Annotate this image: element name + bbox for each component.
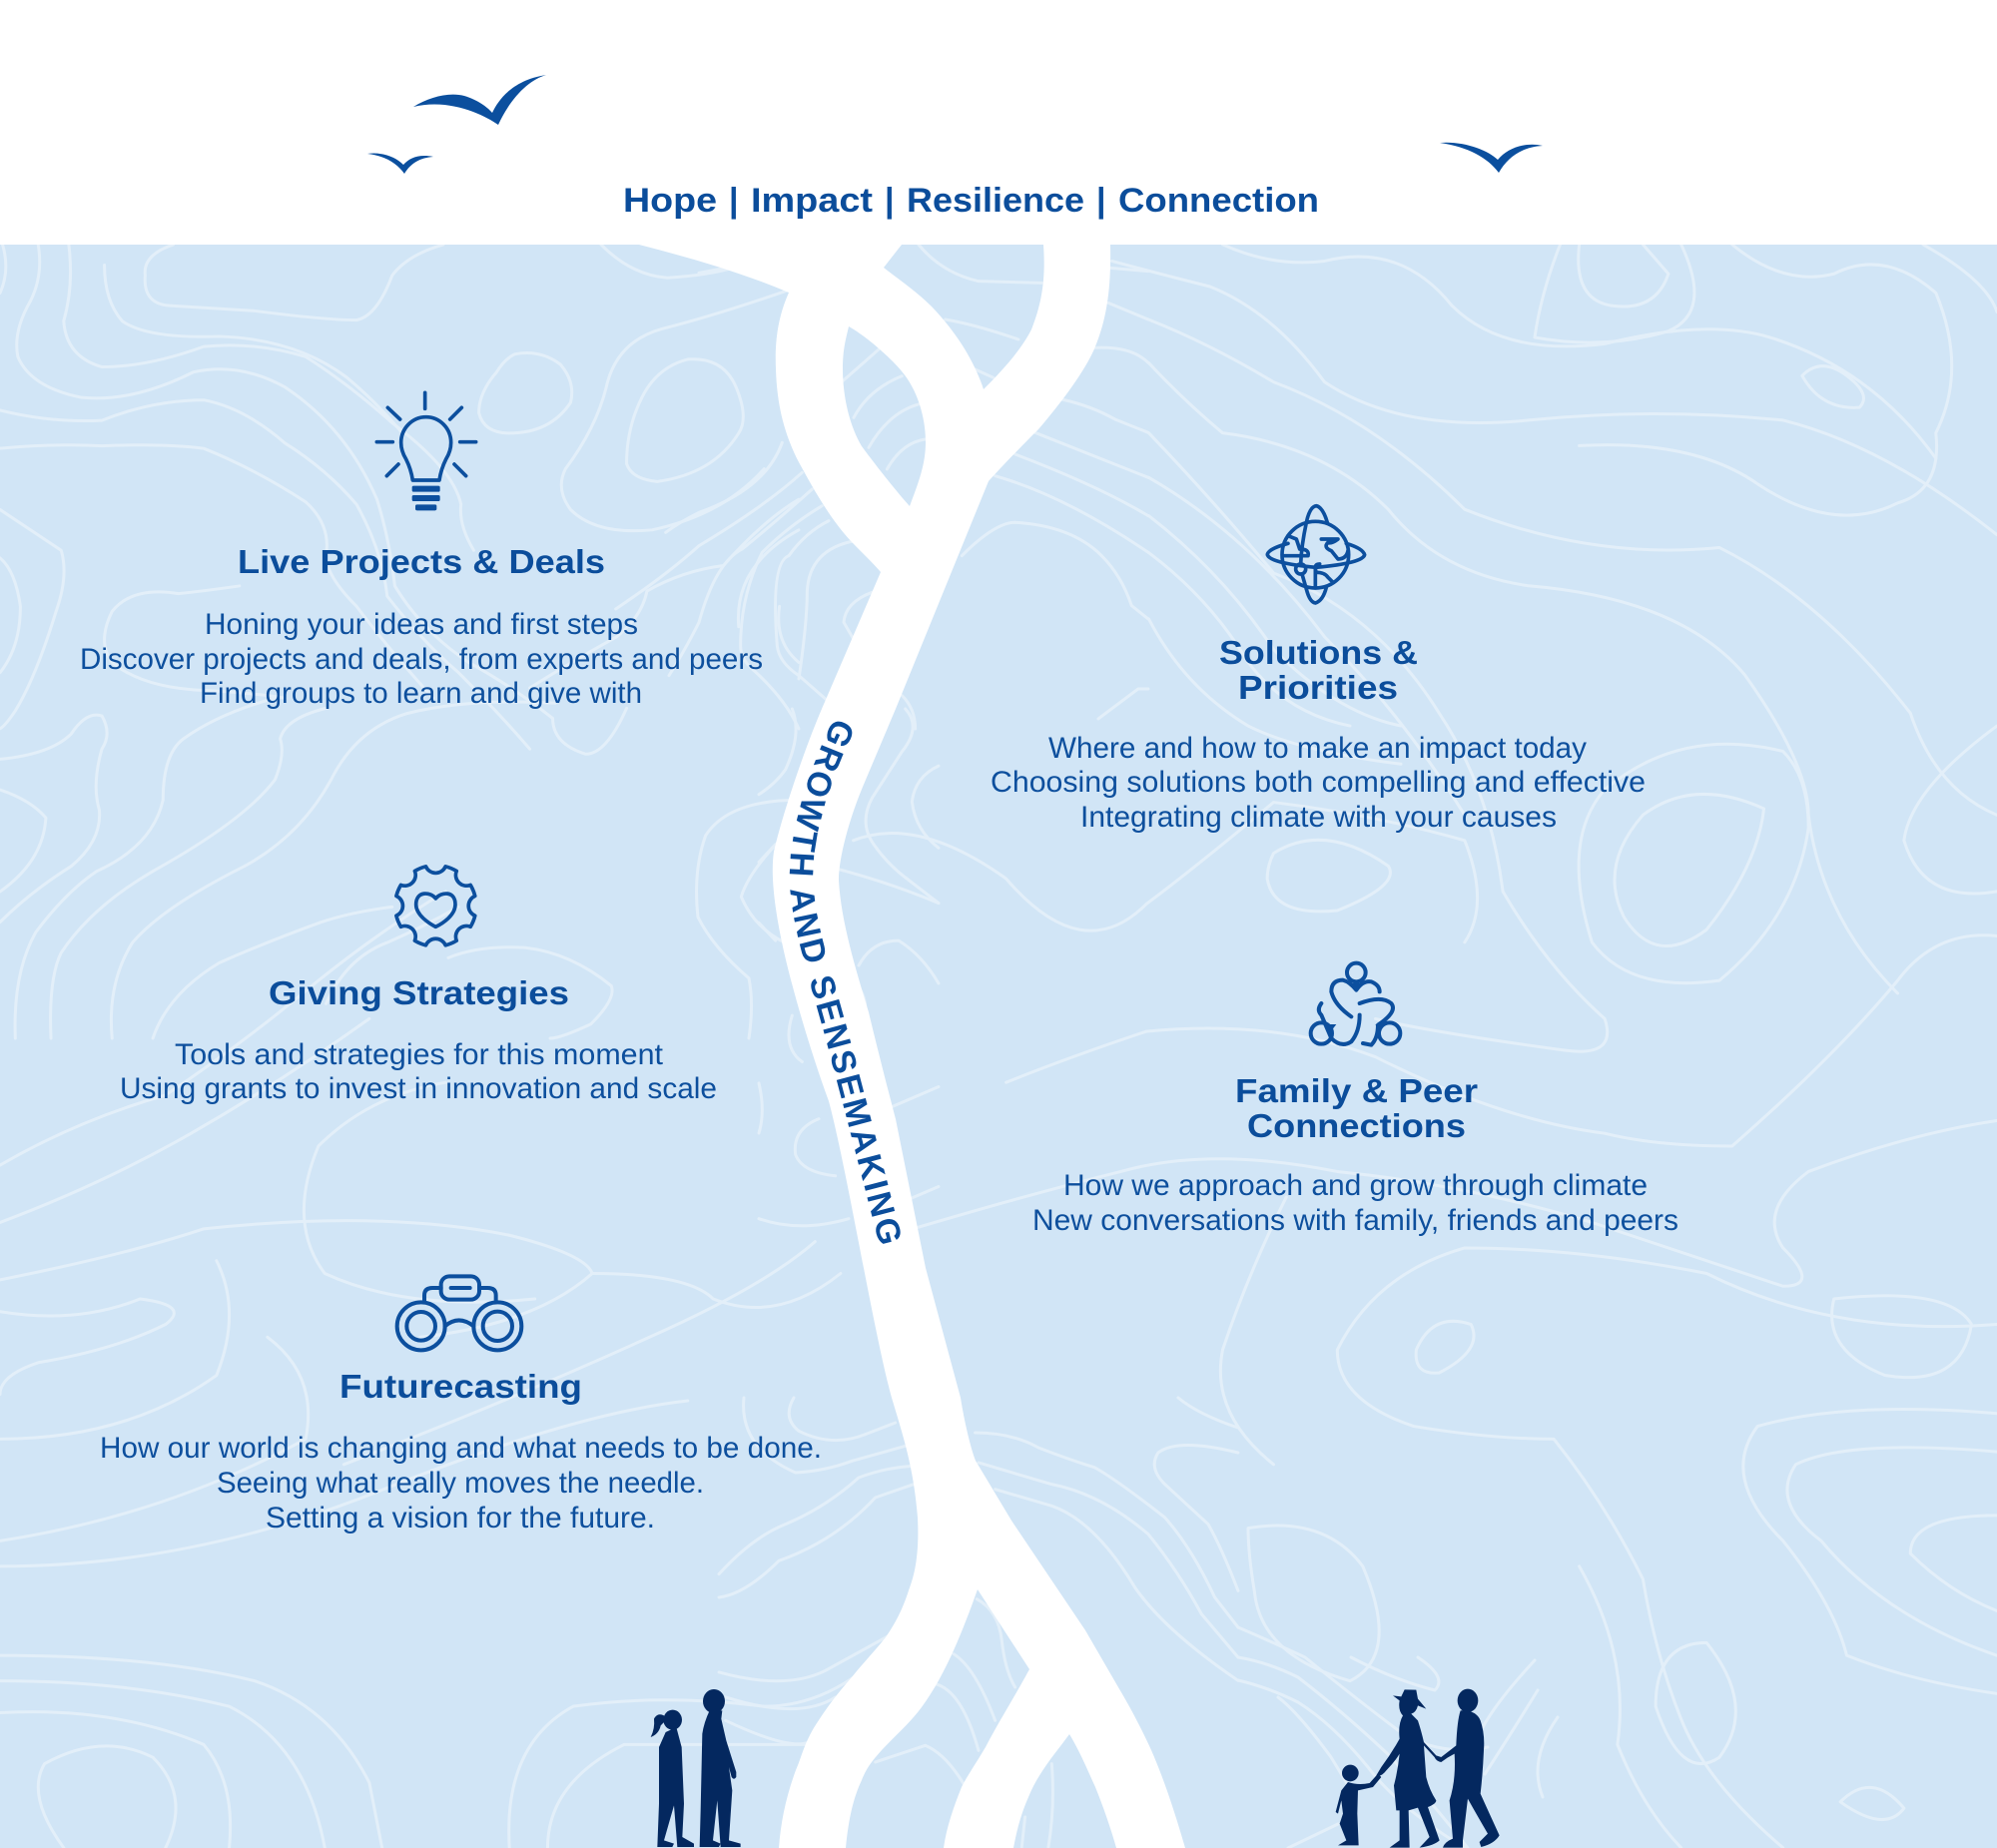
title: Resilience [907, 182, 1084, 220]
icon: light bulb [376, 392, 476, 510]
body text [1032, 1169, 1678, 1237]
panel: Live Projects & Deals [80, 392, 763, 710]
panel: Futurecasting [100, 1276, 822, 1535]
heading [1219, 634, 1418, 706]
body text [120, 1038, 717, 1105]
river label path text: GROWTH AND SENSEMAKING [789, 721, 901, 1244]
silhouettes: family holding hands [1336, 1689, 1500, 1848]
white sky band [0, 0, 1997, 245]
heading: Priorities [1238, 669, 1398, 706]
bird: small left [367, 154, 433, 174]
title: | [729, 182, 739, 220]
bird: right [1440, 143, 1543, 173]
body text: Choosing solutions both compelling and effective [991, 766, 1646, 799]
heading: Live Projects & Deals [238, 543, 605, 580]
body text: How we approach and grow through climate [1063, 1169, 1648, 1202]
bird: large left [413, 75, 546, 125]
title: Impact [751, 182, 873, 220]
icon: family circle [1311, 963, 1400, 1045]
body text: Seeing what really moves the needle. [217, 1467, 704, 1500]
body text: Find groups to learn and give with [200, 677, 642, 710]
title: Connection [1118, 182, 1319, 220]
panel: Giving Strategies [120, 867, 717, 1105]
body text: Discover projects and deals, from experts and peers [80, 643, 763, 676]
body text [80, 608, 763, 710]
title: | [1096, 182, 1106, 220]
heading: Futurecasting [339, 1368, 582, 1405]
title: Hope [623, 182, 717, 220]
icon: gear with heart [396, 867, 475, 945]
silhouettes: two figures walking [651, 1689, 741, 1847]
body text [991, 732, 1646, 834]
body text: Integrating climate with your causes [1080, 801, 1557, 834]
winding white river / path [639, 245, 1185, 1848]
heading: Giving Strategies [269, 974, 569, 1011]
body text: Honing your ideas and first steps [205, 608, 638, 641]
heading: Solutions & [1219, 634, 1418, 671]
body text: Where and how to make an impact today [1048, 732, 1587, 765]
heading: Family & Peer [1235, 1072, 1478, 1109]
heading: Connections [1247, 1107, 1466, 1144]
body text: Tools and strategies for this moment [175, 1038, 664, 1071]
body text [100, 1432, 822, 1535]
body text: Using grants to invest in innovation and scale [120, 1072, 717, 1105]
body text: Setting a vision for the future. [266, 1502, 655, 1535]
icon: binoculars [397, 1276, 521, 1350]
title: | [885, 182, 895, 220]
body text: New conversations with family, friends and peers [1032, 1204, 1678, 1237]
title [623, 182, 1319, 220]
heading [1235, 1072, 1478, 1144]
icon: globe [1267, 506, 1365, 603]
panel: Solutions & Priorities [991, 506, 1646, 834]
panel: Family & Peer Connections [1032, 963, 1678, 1237]
body text: How our world is changing and what needs to be done. [100, 1432, 822, 1465]
